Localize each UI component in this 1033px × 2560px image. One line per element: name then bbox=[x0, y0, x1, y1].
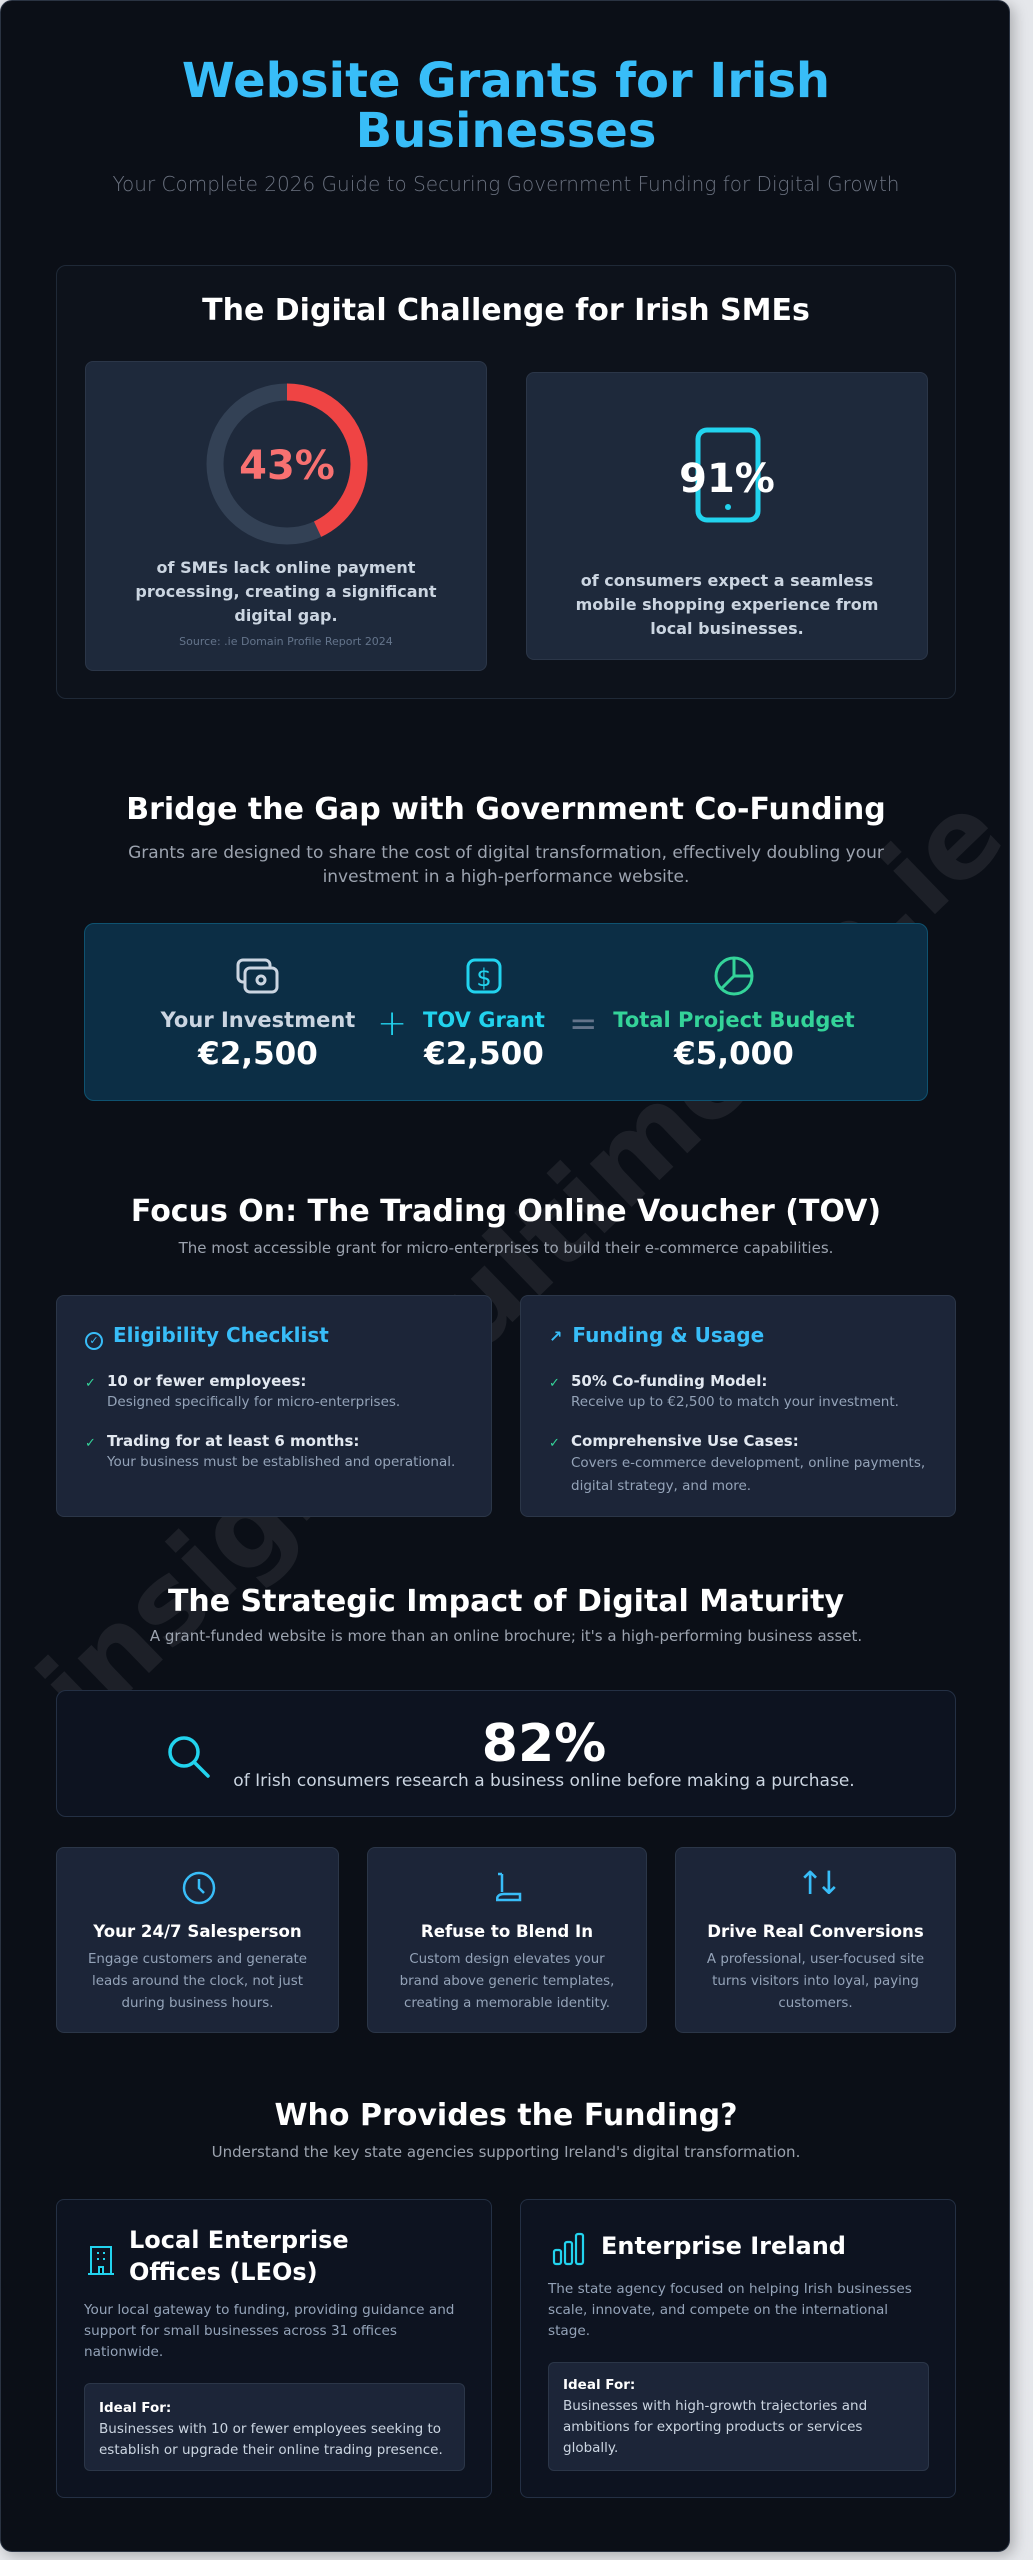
heading: funding usage: ↗ Funding & Usage bbox=[549, 1323, 764, 1347]
watermark: insightmultimedia.ie bbox=[15, 769, 1010, 1753]
plus sign: + bbox=[377, 1003, 407, 1044]
column: TOV grant: TOV Grant bbox=[423, 1008, 545, 1032]
card: conversions bbox=[675, 1847, 956, 2033]
icon: arrows: ↑↓ bbox=[797, 1864, 834, 1902]
panel: funding equation bbox=[84, 923, 928, 1101]
icon: search bbox=[168, 1736, 210, 1778]
card: salesperson: Engage customers and generate leads around the clock, not just during business hours. bbox=[88, 1952, 307, 2011]
card: conversions: A professional, user-focused site turns visitors into loyal, paying customers. bbox=[707, 1952, 924, 2011]
card: LEO: Offices (LEOs) bbox=[129, 2258, 318, 2286]
item: co-funding bbox=[549, 1372, 899, 1410]
card: salesperson: Your 24/7 Salesperson bbox=[93, 1922, 302, 1941]
heading: eligibility: Eligibility Checklist bbox=[113, 1323, 329, 1347]
donut chart 43%: 43% bbox=[239, 443, 335, 489]
icon: phone bbox=[696, 428, 760, 522]
card: funding usage: Covers e-commerce development, online payments, digital strategy, and more. bbox=[571, 1455, 925, 1494]
card: blend in: Refuse to Blend In bbox=[421, 1922, 593, 1941]
card: eligibility bbox=[56, 1295, 492, 1517]
icon: dollar bbox=[466, 958, 502, 994]
text: mobile expectation: of consumers expect a seamless mobile shopping experience from local businesses. bbox=[576, 571, 878, 638]
title: Website Grants for Irish bbox=[182, 53, 830, 109]
heading: TOV: Focus On: The Trading Online Voucher (TOV) bbox=[131, 1194, 881, 1229]
heading: eligibility: ✓ bbox=[89, 1334, 99, 1347]
donut chart 43% bbox=[206, 384, 368, 544]
ideal for: LEO: Ideal For: bbox=[99, 2400, 171, 2416]
text: who intro: Understand the key state agencies supporting Ireland's digital transformation. bbox=[212, 2143, 800, 2161]
icon: bar chart bbox=[552, 2232, 584, 2266]
card: Enterprise Ireland bbox=[520, 2199, 956, 2498]
icon: brush bbox=[496, 1872, 522, 1902]
text: TOV intro: The most accessible grant for micro-enterprises to build their e-commerce capabilities. bbox=[179, 1239, 833, 1257]
column: your investment bbox=[160, 958, 355, 1072]
item: use cases: ✓ bbox=[549, 1436, 560, 1451]
column: total budget bbox=[613, 956, 855, 1072]
ideal for: LEO bbox=[84, 2383, 465, 2471]
title: Businesses bbox=[356, 103, 656, 159]
item: co-funding: 50% Co-funding Model: bbox=[571, 1372, 767, 1390]
equals sign: = bbox=[569, 1004, 598, 1044]
card: Enterprise Ireland: The state agency focused on helping Irish businesses scale, innovate, and compete on the international stage. bbox=[548, 2281, 912, 2339]
icon: building bbox=[88, 2246, 114, 2275]
card: conversions: Drive Real Conversions bbox=[707, 1922, 924, 1941]
stat 82%: 82% bbox=[482, 1714, 606, 1774]
card: eligibility: Designed specifically for micro-enterprises. bbox=[107, 1394, 400, 1410]
card: funding usage: Receive up to €2,500 to match your investment. bbox=[571, 1394, 899, 1410]
card: blend in: Custom design elevates your brand above generic templates, creating a memorable identity. bbox=[400, 1952, 614, 2011]
card: Enterprise Ireland: Enterprise Ireland bbox=[601, 2232, 846, 2260]
heading: digital challenge: The Digital Challenge for Irish SMEs bbox=[202, 293, 810, 328]
card: funding usage bbox=[520, 1295, 956, 1517]
item: use cases bbox=[549, 1432, 925, 1494]
item: employees bbox=[85, 1372, 400, 1410]
heading: strategic impact: The Strategic Impact of Digital Maturity bbox=[168, 1584, 844, 1619]
column: TOV grant: €2,500 bbox=[424, 1036, 544, 1072]
heading: co-funding: Bridge the Gap with Government Co-Funding bbox=[126, 792, 886, 827]
item: co-funding: ✓ bbox=[549, 1376, 560, 1391]
card: 91% stat bbox=[526, 372, 928, 660]
card: blend in bbox=[367, 1847, 647, 2033]
column: TOV grant bbox=[423, 958, 545, 1072]
icon: clock bbox=[182, 1872, 216, 1904]
source: Source: .ie Domain Profile Report 2024 bbox=[179, 635, 393, 648]
card: eligibility: Your business must be established and operational. bbox=[107, 1454, 455, 1470]
column: total budget: Total Project Budget bbox=[613, 1008, 855, 1032]
heading: who provides: Who Provides the Funding? bbox=[274, 2098, 738, 2133]
item: trading: Trading for at least 6 months: bbox=[107, 1432, 359, 1450]
text: co-funding intro: Grants are designed to share the cost of digital transformation, effectively doubling your investment in a high-performance website. bbox=[128, 843, 884, 887]
text: research online: of Irish consumers research a business online before making a purchase. bbox=[233, 1771, 855, 1791]
subtitle: Your Complete 2026 Guide to Securing Government Funding for Digital Growth bbox=[112, 172, 899, 196]
text: impact intro: A grant-funded website is more than an online brochure; it's a high-performing business asset. bbox=[150, 1627, 862, 1645]
column: total budget: €5,000 bbox=[674, 1036, 794, 1072]
ideal for: Enterprise Ireland: Ideal For: bbox=[563, 2377, 635, 2393]
item: use cases: Comprehensive Use Cases: bbox=[571, 1432, 799, 1450]
item: trading bbox=[85, 1432, 455, 1470]
column: your investment: Your Investment bbox=[161, 1008, 355, 1032]
card: LEO: Local Enterprise bbox=[129, 2226, 349, 2254]
panel: 82% stat bbox=[56, 1690, 956, 1817]
panel: digital challenge bbox=[56, 265, 956, 699]
item: employees: 10 or fewer employees: bbox=[107, 1372, 306, 1390]
ideal for: Enterprise Ireland: Businesses with high-growth trajectories and ambitions for exporting products or services globally. bbox=[563, 2398, 867, 2456]
item: employees: ✓ bbox=[85, 1376, 96, 1391]
stat 91%: 91% bbox=[679, 456, 775, 502]
ideal for: Enterprise Ireland bbox=[548, 2362, 929, 2471]
ideal for: LEO: Businesses with 10 or fewer employees seeking to establish or upgrade their online trading presence. bbox=[99, 2421, 443, 2458]
icon: pie bbox=[714, 956, 754, 996]
card: salesperson bbox=[56, 1847, 339, 2033]
column: your investment: €2,500 bbox=[198, 1036, 318, 1072]
card: LEO bbox=[56, 2199, 492, 2498]
text: lack payments: of SMEs lack online payment processing, creating a significant digital gap. bbox=[135, 558, 437, 625]
card: LEO: Your local gateway to funding, providing guidance and support for small businesses across 31 offices nationwide. bbox=[84, 2302, 454, 2360]
icon: dollar: $ bbox=[476, 964, 492, 992]
title bbox=[182, 53, 830, 159]
item: trading: ✓ bbox=[85, 1436, 96, 1451]
card: 43% stat bbox=[85, 361, 487, 671]
icon: cash bbox=[236, 958, 278, 994]
